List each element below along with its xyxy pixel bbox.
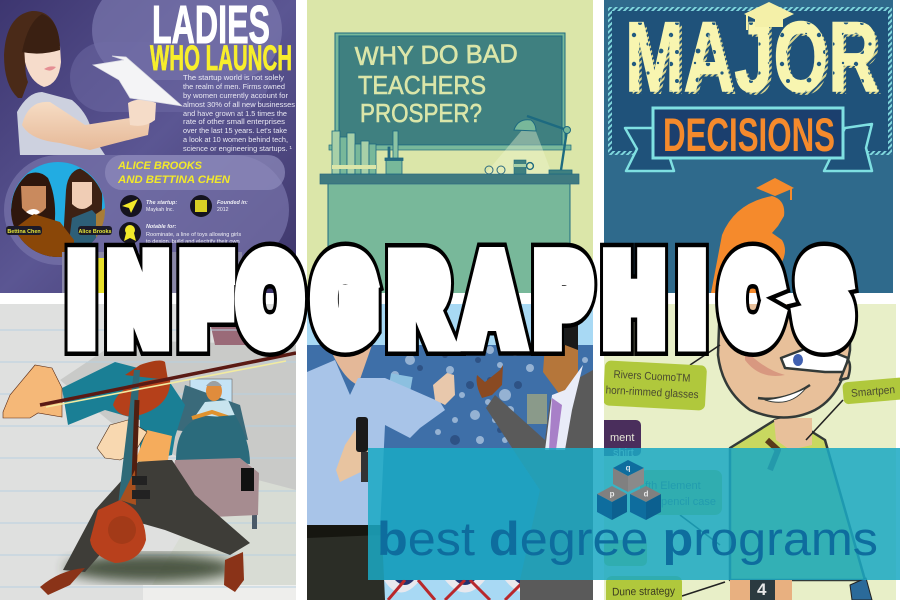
icon: founded (190, 195, 212, 217)
chalkboard (329, 33, 571, 150)
callout: pencil case: pencil case (661, 496, 716, 508)
text: notable for: Roominate, a line of toys allowing girls (146, 232, 241, 238)
panel: violinist (0, 300, 296, 600)
glasses (485, 166, 505, 174)
icon: paper plane (93, 56, 182, 106)
main title: INFOGRAPHICS: INFOGRAPHICS (71, 234, 850, 364)
frame (610, 9, 890, 153)
callout: shirt: ment (610, 432, 634, 444)
text: founded in: 2012 (217, 207, 229, 213)
callout: glasses: Rivers CuomoTM (613, 369, 691, 385)
heading: chalk title: PROSPER? (360, 98, 482, 128)
desk (320, 174, 579, 298)
heading: chalk title: TEACHERS (358, 70, 486, 100)
illustration: violinist (3, 353, 296, 595)
text: the startup: The startup: (146, 200, 177, 206)
callout: shirt (598, 420, 641, 459)
bunting (384, 579, 520, 600)
text: founded in: Founded in: (217, 200, 248, 206)
heading: Who Launch: WHO LAUNCH (150, 39, 292, 78)
text block: intro: the realm of men. Firms owned (183, 82, 285, 91)
callout: pencil case: fth Element (645, 480, 701, 492)
pencil cup (385, 131, 403, 174)
icon: notable (119, 222, 141, 244)
icon: stacked cubes logo: b (625, 464, 630, 473)
callout: smartpen: Smartpen (851, 384, 896, 400)
figure: man in suit (477, 304, 593, 600)
heading: chalk title (354, 44, 517, 122)
text: notable for: Notable for: (146, 224, 176, 230)
callout: novel (604, 540, 647, 566)
callout: glasses: horn-rimmed glasses (605, 384, 699, 401)
text block: intro: science or engineering startups. ¹ (183, 144, 293, 153)
text block: intro: over the last 15 years. Let's take (183, 126, 287, 135)
icon: stacked cubes logo: p (643, 490, 648, 499)
icon: stacked cubes logo (597, 460, 661, 520)
panel: Major Decisions (604, 0, 893, 293)
heading: names (118, 162, 230, 183)
illustration: hospital bed (174, 378, 259, 529)
text block: intro: rate of other small enterprises (183, 117, 285, 126)
callout: dune strategy (606, 576, 682, 600)
text: founded in (217, 200, 248, 211)
text block: intro: a look at 10 women behind tech, (183, 135, 288, 144)
icon: startup (120, 195, 142, 217)
text block: intro (183, 73, 295, 153)
panel: debate photo (307, 304, 593, 600)
figure: man with microphone (307, 345, 455, 600)
illustration: woman with paper plane (4, 11, 182, 155)
portrait: Alice Brooks and Bettina Chen (6, 162, 112, 262)
text block: intro: The startup world is not solely (183, 73, 284, 82)
logo band: best degree programs (368, 448, 900, 580)
ribbon banner (625, 108, 872, 171)
label: Alice Brooks: Alice Brooks (79, 229, 111, 235)
icon: thinking graduate (711, 178, 794, 293)
text: notable for: to design, build and electrify their own (146, 239, 240, 245)
bow (40, 353, 296, 405)
wordmark: best degree programs (377, 512, 878, 565)
callout: shirt: shirt (613, 447, 634, 459)
label: Bettina Chen: Bettina Chen (7, 229, 41, 235)
text block: intro: by women currently account for (183, 91, 289, 100)
callout: smartpen (842, 377, 900, 404)
desk lamp (485, 116, 572, 174)
books (332, 131, 376, 174)
icon: stacked cubes logo: d (609, 490, 614, 499)
callout: glasses (603, 360, 707, 411)
leader lines (680, 345, 843, 596)
callout: dune strategy: Dune strategy (612, 585, 676, 598)
heading: Major (629, 20, 880, 95)
heading: names: ALICE BROOKS (117, 160, 202, 172)
crowd (307, 345, 593, 585)
text block: intro: and have grown at 1.5 times the (183, 109, 287, 118)
text block: intro: almost 30% of all new businesses (183, 100, 295, 109)
icon: graduation cap (744, 2, 794, 30)
number on shirt: 4 (757, 580, 767, 599)
panel: Ladies Who Launch (0, 0, 296, 293)
figure: student (718, 300, 872, 600)
callout: pencil case (640, 470, 722, 515)
text: the startup (146, 200, 177, 213)
text: the startup: Maykah Inc. (146, 207, 174, 213)
main title: INFOGRAPHICS: INFOGRAPHICS (71, 234, 850, 364)
mug (514, 160, 533, 174)
text: notable for (146, 224, 241, 245)
panel: Why Do Bad Teachers Prosper (307, 0, 593, 298)
heading: chalk title: WHY DO BAD (355, 38, 518, 71)
heading: names: AND BETTINA CHEN (117, 174, 231, 186)
panel: student cartoon (598, 300, 900, 600)
